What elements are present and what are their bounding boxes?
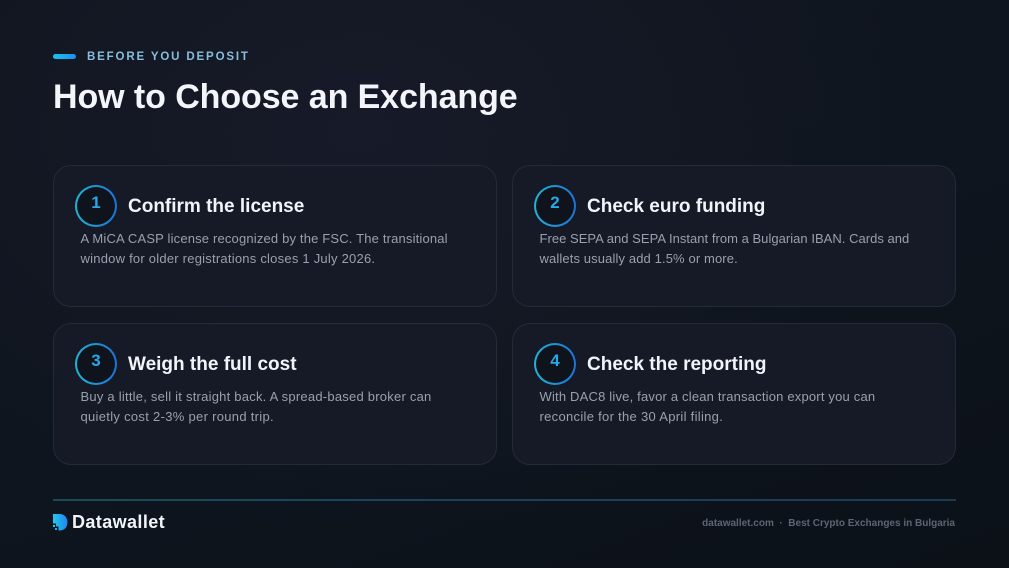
text: step 2 body — [540, 231, 909, 266]
icon: number 4 — [534, 343, 576, 385]
panel: step 2 check euro funding — [512, 165, 956, 307]
icon: number 2 — [534, 185, 576, 227]
icon: number 1: 1 — [91, 193, 101, 212]
heading: check the reporting: Check the reporting — [587, 354, 766, 375]
panel: step 1 confirm the license — [53, 165, 497, 307]
icon: number 2: 2 — [550, 193, 560, 212]
icon: number 3: 3 — [91, 351, 101, 370]
icon: number 3 — [75, 343, 117, 385]
eyebrow label: BEFORE YOU DEPOSIT — [87, 51, 250, 63]
icon: number 4: 4 — [550, 351, 560, 370]
text: step 1 body: A MiCA CASP license recognized by the FSC. The transitional — [80, 231, 448, 246]
heading: check euro funding: Check euro funding — [587, 196, 765, 217]
heading: weigh the full cost: Weigh the full cost — [128, 354, 297, 375]
text: step 4 body: With DAC8 live, favor a clean transaction export you can — [540, 389, 875, 404]
panel: step 4 check the reporting — [512, 323, 956, 465]
icon: datawallet logo — [53, 514, 68, 530]
footer source text: datawallet.com · Best Crypto Exchanges in Bulgaria — [702, 518, 955, 529]
text: step 3 body — [80, 389, 432, 424]
panel: step 3 weigh the full cost — [53, 323, 497, 465]
text: step 3 body: Buy a little, sell it straight back. A spread-based broker can — [80, 389, 432, 404]
text: step 1 body — [80, 231, 448, 266]
eyebrow accent bar — [53, 54, 76, 59]
text: step 4 body — [540, 389, 875, 424]
logo wordmark: Datawallet — [72, 512, 165, 532]
text: step 2 body: Free SEPA and SEPA Instant from a Bulgarian IBAN. Cards and — [540, 231, 909, 246]
text: step 4 body: reconcile for the 30 April filing. — [540, 408, 723, 424]
icon: number 1 — [75, 185, 117, 227]
heading: confirm the license: Confirm the license — [128, 196, 304, 217]
text: step 3 body: quietly cost 2-3% per round trip. — [80, 408, 274, 424]
text: step 1 body: window for older registrations closes 1 July 2026. — [80, 250, 375, 266]
title: How to Choose an Exchange — [53, 78, 518, 116]
text: step 2 body: wallets usually add 1.5% or more. — [540, 250, 738, 266]
